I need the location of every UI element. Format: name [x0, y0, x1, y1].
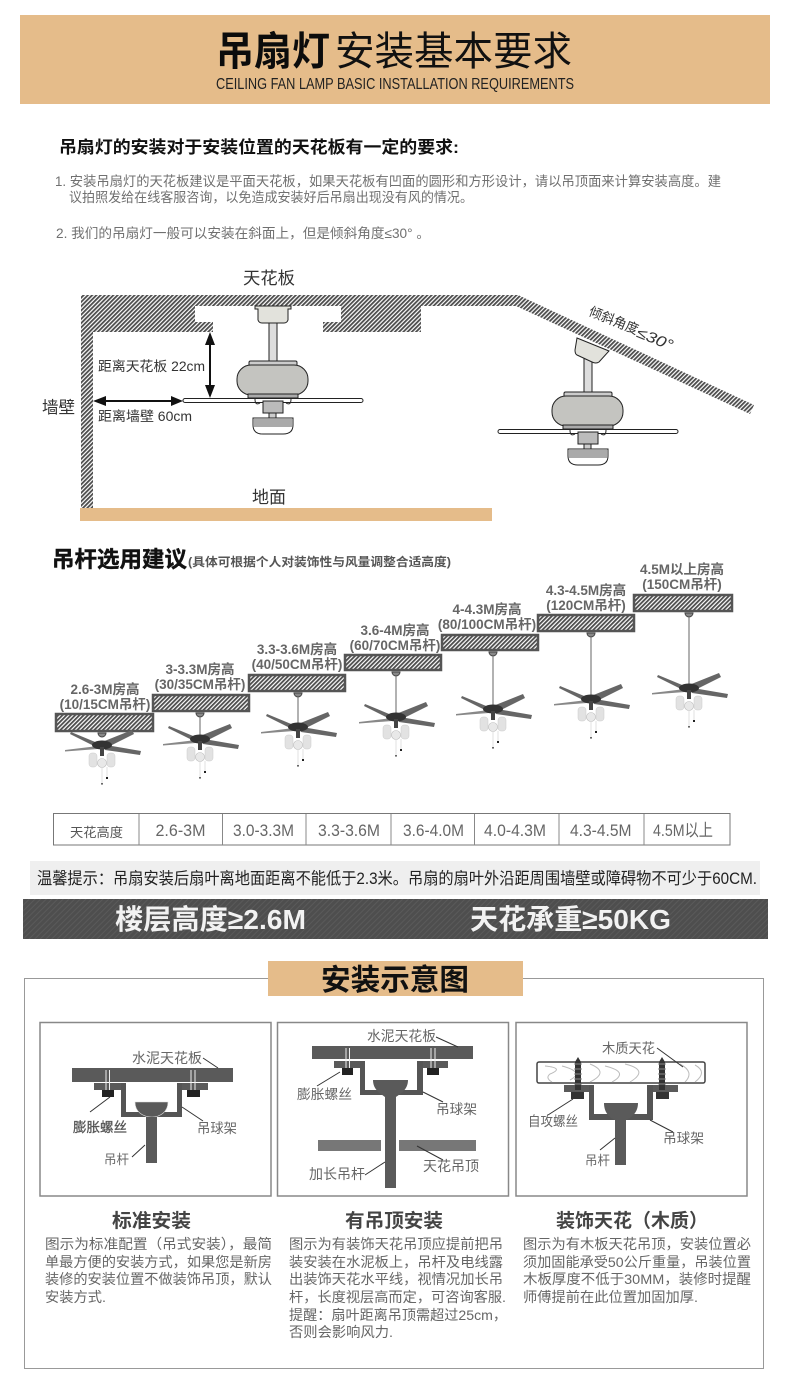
panel: wooden ceiling install	[516, 1022, 747, 1196]
arrow: distance to ceiling	[205, 332, 215, 398]
step 7: (150CM吊杆)	[642, 576, 722, 592]
ceiling height table: 天花高度	[70, 825, 123, 840]
panel: standard install: 膨胀螺丝	[73, 1120, 127, 1135]
caption: suspended ceiling install: 出装饰天花水平线，视情况加长吊	[289, 1271, 503, 1287]
caption: wooden ceiling install: 木板厚度不低于30MM，装修时提醒	[523, 1271, 751, 1287]
floor height spec: 楼层高度≥2.6M	[115, 904, 306, 935]
installation section frame	[24, 978, 764, 1368]
panel: standard install	[40, 1022, 271, 1196]
requirements heading: 吊扇灯的安装对于安装位置的天花板有一定的要求:	[59, 137, 459, 157]
wall label: 墙壁	[42, 398, 75, 417]
ceiling height table: 2.6-3M	[156, 821, 206, 840]
ceiling height table: 4.5M以上	[653, 821, 713, 840]
ceiling height table	[54, 814, 730, 845]
label: distance to ceiling: 距离天花板 22cm	[98, 358, 205, 374]
panel: wooden ceiling install: 吊杆	[585, 1153, 610, 1168]
caption: suspended ceiling install: 装安装在水泥板上，吊杆及电线露	[289, 1254, 503, 1270]
installation position diagram	[42, 269, 754, 521]
downrod subtitle: (具体可根据个人对装饰性与风量调整合适高度)	[188, 554, 451, 569]
sloped ceiling fan	[498, 338, 678, 465]
caption: suspended ceiling install: 否则会影响风力.	[289, 1324, 393, 1340]
caption: standard install: 标准安装	[112, 1210, 191, 1232]
step 6: 4.3-4.5M房高	[546, 582, 626, 598]
step 1: 2.6-3M房高	[70, 681, 140, 697]
caption: suspended ceiling install: 杆，长度视层高而定，可咨询客服.	[289, 1289, 506, 1305]
panel: suspended ceiling install	[278, 1022, 508, 1196]
step 6	[538, 582, 634, 739]
caption: standard install: 图示为标准配置（吊式安装），最简	[45, 1236, 272, 1252]
caption: standard install	[45, 1210, 272, 1305]
ceiling label: 天花板	[243, 269, 295, 288]
step 2: (30/35CM吊杆)	[155, 676, 245, 692]
floor label: 地面	[252, 488, 286, 507]
panel: standard install: 水泥天花板	[132, 1050, 202, 1066]
ceiling height table: 4.3-4.5M	[570, 821, 632, 840]
panel: suspended ceiling install: 吊球架	[436, 1102, 477, 1117]
caption: suspended ceiling install	[289, 1210, 507, 1340]
caption: wooden ceiling install: 装饰天花（木质）	[556, 1209, 708, 1232]
panel: wooden ceiling install: 自攻螺丝	[528, 1114, 578, 1129]
caption: wooden ceiling install: 师傅提前在此位置加固加厚.	[523, 1289, 698, 1305]
step 7: 4.5M以上房高	[640, 561, 724, 577]
caption: wooden ceiling install: 图示为有木板天花吊顶，安装位置必	[523, 1236, 751, 1252]
requirements text block	[55, 137, 721, 241]
floor	[80, 508, 492, 521]
step 5: (80/100CM吊杆)	[438, 616, 536, 632]
step 3: (40/50CM吊杆)	[252, 656, 342, 672]
step 6: (120CM吊杆)	[546, 597, 626, 613]
caption: suspended ceiling install: 图示为有装饰天花吊顶应提前把吊	[289, 1236, 503, 1252]
label: distance to wall: 距离墙壁 60cm	[98, 408, 192, 424]
English subtitle: CEILING FAN LAMP BASIC INSTALLATION REQUIREMENTS	[216, 76, 574, 93]
step 5	[438, 601, 538, 749]
title: 吊扇灯	[216, 30, 330, 74]
step 4: 3.6-4M房高	[360, 622, 430, 638]
caption: wooden ceiling install: 须加固能承受50公斤重量，吊装位置	[523, 1254, 751, 1270]
step 1	[56, 681, 153, 785]
panel: suspended ceiling install: 天花吊顶	[423, 1158, 479, 1174]
slope angle label	[586, 304, 676, 354]
ceiling height table: 3.6-4.0M	[403, 821, 464, 840]
installation section heading: 安装示意图	[321, 964, 469, 997]
title continuation: 安装基本要求	[335, 30, 572, 74]
step 4: (60/70CM吊杆)	[350, 637, 440, 653]
panel: wooden ceiling install: 木质天花	[602, 1041, 655, 1056]
step 1: (10/15CM吊杆)	[60, 696, 150, 712]
ceiling load spec: 天花承重≥50KG	[470, 904, 671, 935]
ceiling height table: 4.0-4.3M	[484, 821, 546, 840]
downrod section heading: 吊杆选用建议	[52, 547, 187, 572]
panel: suspended ceiling install: 加长吊杆	[309, 1166, 365, 1182]
arrow: distance to wall	[93, 396, 183, 406]
caption: suspended ceiling install: 有吊顶安装	[345, 1210, 443, 1232]
tip bar	[30, 861, 760, 895]
ceiling height table: 3.0-3.3M	[233, 821, 294, 840]
step 3	[249, 641, 345, 767]
step 2	[153, 661, 249, 779]
requirement 2: 2. 我们的吊扇灯一般可以安装在斜面上，但是倾斜角度≤30° 。	[56, 226, 430, 241]
slope angle label: 倾斜角度	[587, 304, 641, 337]
caption: standard install: 装修的安装位置不做装饰吊顶，默认	[45, 1271, 272, 1287]
step 3: 3.3-3.6M房高	[257, 641, 337, 657]
slope angle label: ≤30°	[634, 324, 676, 354]
caption: wooden ceiling install	[523, 1209, 751, 1305]
downrod staircase chart	[56, 561, 732, 785]
caption: standard install: 安装方式.	[45, 1289, 106, 1305]
panel: standard install: 吊球架	[197, 1121, 237, 1136]
ceiling and wall	[81, 295, 754, 508]
ceiling height table: 3.3-3.6M	[318, 821, 380, 840]
requirement 1: 1. 安装吊扇灯的天花板建议是平面天花板，如果天花板有凹面的圆形和方形设计，请以吊顶面来计算安装高度。建	[55, 173, 721, 189]
step 7	[634, 561, 732, 728]
installation section heading	[268, 961, 523, 997]
header banner	[20, 15, 770, 104]
panel: wooden ceiling install: 吊球架	[663, 1131, 704, 1146]
spec band	[23, 899, 768, 939]
caption: standard install: 单最方便的安装方式，如果您是新房	[45, 1254, 272, 1270]
step 5: 4-4.3M房高	[452, 601, 522, 617]
downrod section heading	[52, 547, 451, 572]
caption: suspended ceiling install: 提醒：扇叶距离吊顶需超过25cm，	[289, 1307, 507, 1323]
panel: suspended ceiling install: 水泥天花板	[367, 1028, 436, 1044]
step 4	[345, 622, 441, 757]
panel: standard install: 吊杆	[104, 1152, 129, 1167]
panel: suspended ceiling install: 膨胀螺丝	[297, 1087, 352, 1102]
flat ceiling fan	[183, 306, 363, 434]
step 2: 3-3.3M房高	[165, 661, 235, 677]
requirement 1 second line: 议拍照发给在线客服咨询，以免造成安装好后吊扇出现没有风的情况。	[69, 189, 473, 205]
